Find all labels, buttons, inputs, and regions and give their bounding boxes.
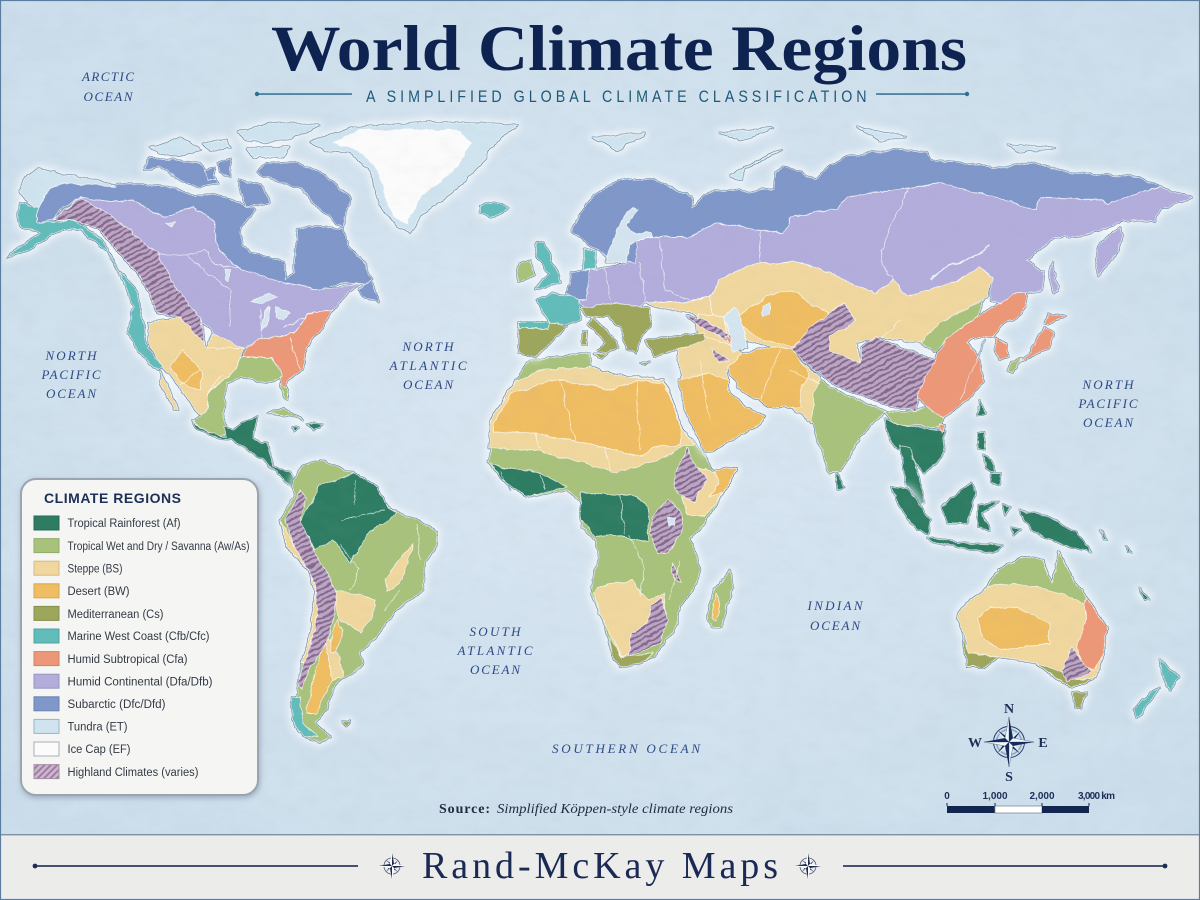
humid subtropical southeast USA — [243, 310, 333, 397]
tundra fringe — [310, 122, 517, 233]
legend: desert — [34, 584, 130, 598]
borders South America — [340, 480, 420, 610]
title: World Climate Regions — [271, 13, 967, 85]
highland Andes — [285, 490, 337, 690]
Borneo — [941, 482, 976, 523]
steppe Pakistan — [790, 360, 822, 423]
legend heading: CLIMATE REGIONS — [44, 490, 181, 506]
ocean label: North Pacific west: OCEAN — [46, 386, 97, 401]
legend: mediterranean: Mediterranean (Cs) — [68, 609, 164, 621]
steppe Sahel — [489, 367, 694, 473]
Kamchatka and Sakhalin — [1049, 227, 1123, 293]
scale bar — [944, 791, 1115, 813]
legend: steppe: Steppe (BS) — [68, 564, 123, 576]
compass rose: W — [968, 736, 982, 751]
Mediterranean southwest and southeast — [962, 633, 1096, 688]
legend: subarctic: Subarctic (Dfc/Dfd) — [68, 699, 166, 711]
continent: Maritime Southeast Asia — [891, 432, 1150, 600]
rainforest Congo — [581, 493, 648, 542]
ocean label: Southern Ocean: SOUTHERN OCEAN — [552, 741, 701, 756]
desert center — [978, 607, 1049, 650]
Tasmania — [1072, 692, 1086, 708]
steppe and desert Horn of Africa — [682, 467, 737, 517]
legend: ice cap: Ice Cap (EF) — [68, 744, 131, 756]
Taiwan and Hainan — [938, 400, 985, 433]
ocean label: North Pacific east: PACIFIC — [1078, 396, 1138, 411]
savanna Gulf coast and Mexico — [193, 357, 282, 437]
Lake Baikal — [930, 245, 990, 280]
legend: steppe — [34, 561, 123, 576]
Mediterranean islands — [583, 330, 650, 365]
ocean label: South Atlantic: OCEAN — [470, 662, 521, 677]
source note: Source: — [439, 802, 490, 817]
legend: desert: Desert (BW) — [68, 586, 130, 598]
Korea — [994, 337, 1008, 360]
legend: tundra: Tundra (ET) — [68, 722, 128, 734]
legend: savanna — [34, 539, 250, 553]
publisher name: Rand-McKay Maps — [422, 845, 778, 887]
footer rule left — [33, 864, 358, 868]
legend: savanna: Tropical Wet and Dry / Savanna (Aw/As) — [68, 541, 250, 553]
Caribbean islands — [268, 408, 323, 431]
marine west coast Alaska and Pacific coast — [7, 203, 163, 370]
legend: humid continental — [34, 674, 213, 688]
British Isles — [517, 243, 560, 290]
scale bar: 3,000 km — [1078, 791, 1115, 802]
legend: tundra — [34, 719, 128, 734]
steppe Levant and Iraq — [677, 336, 742, 383]
highland Ethiopia and Rift — [650, 448, 707, 583]
continent: North America — [7, 123, 380, 487]
savanna base — [489, 353, 737, 667]
steppe base — [957, 553, 1107, 688]
borders Africa — [500, 380, 680, 600]
compass rose: N — [1004, 702, 1014, 717]
subarctic Canada and Alaska — [37, 178, 372, 290]
Mediterranean Balkans and Turkey — [581, 303, 705, 357]
continent: Africa — [489, 353, 737, 667]
compass rose: S — [1005, 770, 1013, 785]
steppe Chaco — [335, 590, 375, 632]
Northern islands — [592, 127, 1054, 180]
borders North America — [157, 250, 300, 393]
Philippines — [978, 432, 1001, 485]
legend: marine west coast: Marine West Coast (Cfb/Cfc) — [68, 631, 210, 643]
subarctic Scandinavia and Siberia — [572, 150, 1160, 262]
continent: Greenland — [310, 122, 517, 233]
rainforest Southeast Asia — [884, 418, 945, 472]
legend: tropical rainforest — [34, 516, 181, 530]
Falkland islands — [342, 720, 350, 726]
legend panel — [21, 479, 258, 795]
Japan — [1008, 313, 1065, 374]
rainforest Central America — [192, 417, 295, 487]
Sri Lanka — [836, 473, 845, 489]
legend: humid subtropical: Humid Subtropical (Cfa) — [68, 654, 188, 666]
source note: Simplified Köppen-style climate regions — [497, 802, 734, 817]
borders Eurasia — [605, 188, 985, 420]
footer compass right — [795, 853, 821, 879]
ice cap — [333, 130, 470, 223]
ocean label: North Pacific west: NORTH — [44, 348, 97, 363]
footer band — [0, 834, 1200, 900]
Lake Victoria — [668, 517, 676, 526]
continent: South America — [280, 460, 437, 743]
scale bar: 2,000 — [1029, 791, 1055, 802]
ocean label: Arctic Ocean: ARCTIC — [81, 69, 134, 84]
compass rose — [968, 702, 1048, 785]
steppe Eastern Europe strip — [645, 297, 720, 330]
tundra north slope Alaska — [20, 168, 115, 207]
ocean label: North Atlantic: NORTH — [402, 339, 454, 354]
highland southern Africa — [627, 597, 668, 657]
Caspian and Aral seas — [723, 303, 770, 353]
compass rose: E — [1038, 736, 1048, 751]
steppe Central Asia and Mongolia — [710, 263, 992, 363]
legend: humid continental: Humid Continental (Dfa/Dfb) — [68, 676, 213, 688]
Indonesian and Pacific islands — [1003, 505, 1150, 600]
legend: ice cap — [34, 742, 131, 756]
continent: Australia and New Zealand — [957, 553, 1180, 718]
Baja California — [160, 370, 178, 410]
legend: mediterranean — [34, 606, 164, 621]
steppe Brazil — [385, 543, 413, 592]
ocean label: Indian Ocean: INDIAN — [806, 598, 864, 613]
desert Patagonia and Monte — [307, 640, 332, 713]
legend: subarctic — [34, 697, 166, 711]
savanna Indochina north — [884, 408, 944, 428]
humid continental Europe and Siberia — [579, 183, 1192, 310]
legend: highland: Highland Climates (varies) — [68, 767, 199, 779]
New Zealand — [1134, 660, 1180, 718]
ocean label: North Pacific east: NORTH — [1082, 377, 1134, 392]
ocean label: North Pacific west: PACIFIC — [40, 367, 101, 382]
legend: highland — [34, 765, 199, 779]
rainforest West Africa — [491, 463, 567, 497]
legend: marine west coast — [34, 629, 210, 643]
desert Central Asia — [737, 290, 830, 347]
savanna north — [987, 553, 1090, 607]
ocean label: North Atlantic: OCEAN — [403, 377, 454, 392]
ocean label: Indian Ocean: OCEAN — [810, 618, 861, 633]
continent: Eurasia — [480, 127, 1192, 508]
Newfoundland — [358, 280, 380, 302]
Mediterranean Cape — [609, 637, 654, 667]
steppe Argentina — [325, 640, 343, 680]
Iberia — [519, 322, 567, 357]
humid subtropical east — [1077, 597, 1107, 672]
ocean label: North Pacific east: OCEAN — [1083, 415, 1134, 430]
Iceland — [480, 202, 508, 218]
desert Iran — [728, 347, 810, 407]
ocean label: North Atlantic: ATLANTIC — [388, 358, 467, 373]
Sumatra — [891, 487, 930, 533]
desert southwest USA — [170, 350, 203, 390]
steppe southern Africa — [592, 580, 666, 657]
ocean label: Arctic Ocean: OCEAN — [84, 89, 134, 104]
footer compass left — [379, 853, 405, 879]
highland Tibet and Tian Shan — [792, 303, 935, 410]
marine France and Low Countries — [537, 250, 596, 325]
savanna base — [280, 460, 437, 743]
scale bar: 0 — [944, 791, 950, 802]
Great Lakes — [166, 222, 307, 330]
highland Great Dividing Range — [1061, 647, 1091, 682]
highland Caucasus — [687, 315, 732, 363]
ocean label: South Atlantic: ATLANTIC — [456, 643, 533, 658]
desert Arabia — [680, 373, 765, 453]
humid continental Canada and USA — [53, 197, 367, 348]
steppe Caucasus base — [695, 314, 732, 348]
scale bar: 1,000 — [982, 791, 1008, 802]
world map — [7, 122, 1192, 743]
savanna India — [812, 380, 885, 472]
Arctic islands — [143, 123, 350, 227]
New Guinea — [1019, 510, 1091, 552]
highland Rockies — [53, 198, 208, 363]
steppe Pacific coast — [280, 520, 318, 663]
savanna NE China — [921, 300, 985, 352]
rainforest Malay Peninsula — [900, 445, 925, 508]
steppe western USA and Mexico — [148, 317, 243, 417]
rainforest Amazon — [300, 472, 398, 563]
Java and Lesser Sunda — [928, 537, 1003, 553]
footer rule right — [843, 864, 1167, 868]
marine Chile — [292, 697, 317, 737]
humid subtropical China — [916, 293, 1026, 417]
Baltic Sea — [605, 207, 652, 262]
Madagascar — [707, 570, 733, 627]
desert Sahara — [494, 380, 682, 457]
Sulawesi — [978, 502, 999, 530]
subtitle with rules: A SIMPLIFIED GLOBAL CLIMATE CLASSIFICATION — [366, 88, 867, 106]
legend: humid subtropical — [34, 652, 188, 666]
legend: tropical rainforest: Tropical Rainforest (Af) — [68, 518, 181, 530]
ocean label: South Atlantic: SOUTH — [470, 624, 521, 639]
